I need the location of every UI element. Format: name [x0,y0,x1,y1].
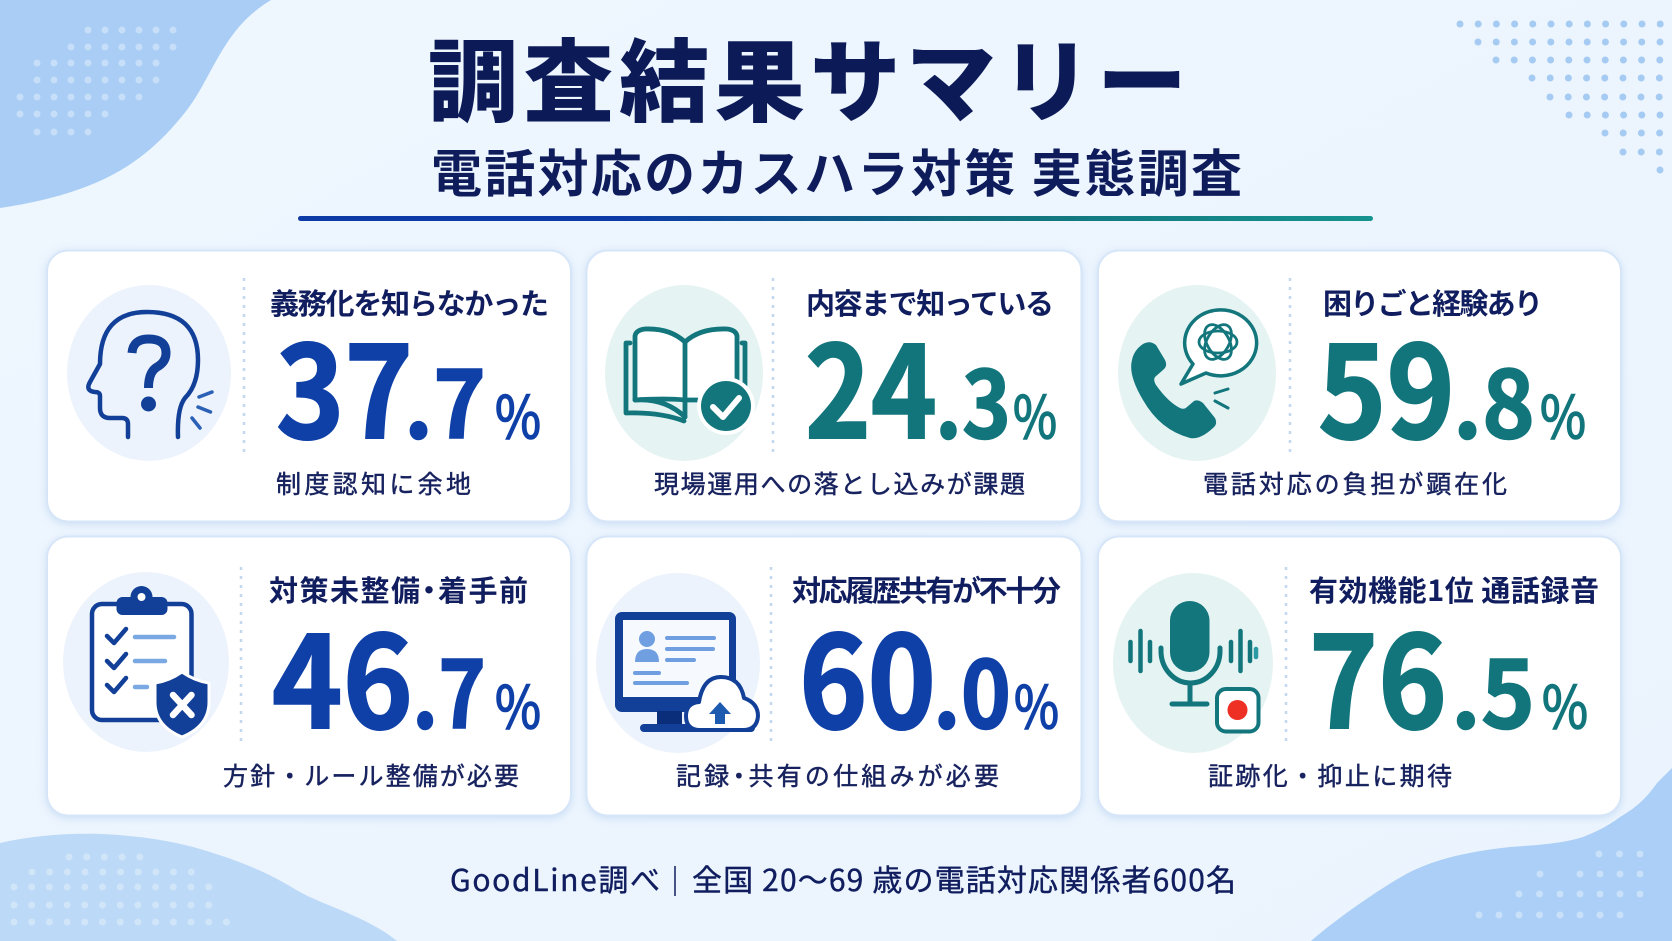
description: 制度認知に余地 [276,465,471,501]
icon: head with question mark [67,285,231,461]
value: 60.0%: % [1014,661,1059,745]
heading: 対応履歴共有が不十分 [792,568,1061,610]
icon: monitor with cloud upload [596,573,760,753]
description: 現場運用への落とし込みが課題 [654,465,1025,501]
value: 60.0% [799,581,1059,765]
value: 76.5% [1309,581,1588,765]
footer source note: GoodLine調べ [450,856,660,900]
heading: 内容まで知っている [806,281,1054,323]
heading: 対策未整備・着手前 [269,568,528,610]
value: 24.3%: .3 [935,330,1011,465]
value: 46.7%: % [495,661,541,745]
icon: phone with speech bubble [1118,285,1276,461]
description: 電話対応の負担が顕在化 [1203,465,1507,501]
value: 46.7%: 46 [272,581,413,765]
panel: 対応履歴共有が不十分 [586,536,1082,816]
subtitle: 電話対応のカスハラ対策 実態調査 [431,133,1242,207]
background blob: bottom right [1311,768,1672,941]
footer source note: 全国 20～69 歳の電話対応関係者600名 [692,856,1236,900]
value: 37.7%: 37 [276,291,413,475]
value: 59.8%: % [1540,371,1586,455]
value: 60.0%: .0 [933,620,1011,755]
value: 24.3% [805,291,1057,475]
value: 59.8%: 59 [1318,291,1455,475]
value: 76.5%: 76 [1309,581,1447,765]
panel: 対策未整備・着手前 [47,536,571,816]
heading: 義務化を知らなかった [270,281,549,323]
value: 60.0%: 60 [799,581,936,765]
value: 37.7%: % [495,371,541,455]
panel: 内容まで知っている [586,250,1082,522]
value: 46.7% [272,581,541,765]
footer source note [450,856,1236,900]
value: 59.8% [1318,291,1586,475]
panel: 困りごと経験あり [1098,250,1621,522]
value: 76.5%: % [1542,661,1588,745]
description: 証跡化・抑止に期待 [1208,757,1452,793]
value: 46.7%: .7 [412,620,486,755]
background blob: bottom left [0,834,397,941]
icon: microphone with record button [1113,573,1273,753]
panel: 義務化を知らなかった [47,250,571,522]
description: 記録・共有の仕組みが必要 [676,757,999,793]
heading: 有効機能1位 通話録音 [1309,568,1599,610]
value: 24.3%: 24 [805,291,937,475]
title underline [298,216,1373,221]
value: 76.5%: .5 [1451,620,1535,755]
description: 方針・ルール整備が必要 [223,757,519,793]
value: 37.7% [276,291,541,475]
icon: clipboard with shield [63,572,229,752]
panel: 有効機能1位 通話録音 [1098,536,1621,816]
value: 24.3%: % [1013,371,1057,455]
heading: 困りごと経験あり [1323,281,1543,323]
value: 37.7%: .7 [404,330,486,465]
value: 59.8%: .8 [1453,330,1535,465]
icon: book with check [605,285,763,461]
title: 調査結果サマリー [428,10,1187,140]
background blob: top left [0,0,271,208]
